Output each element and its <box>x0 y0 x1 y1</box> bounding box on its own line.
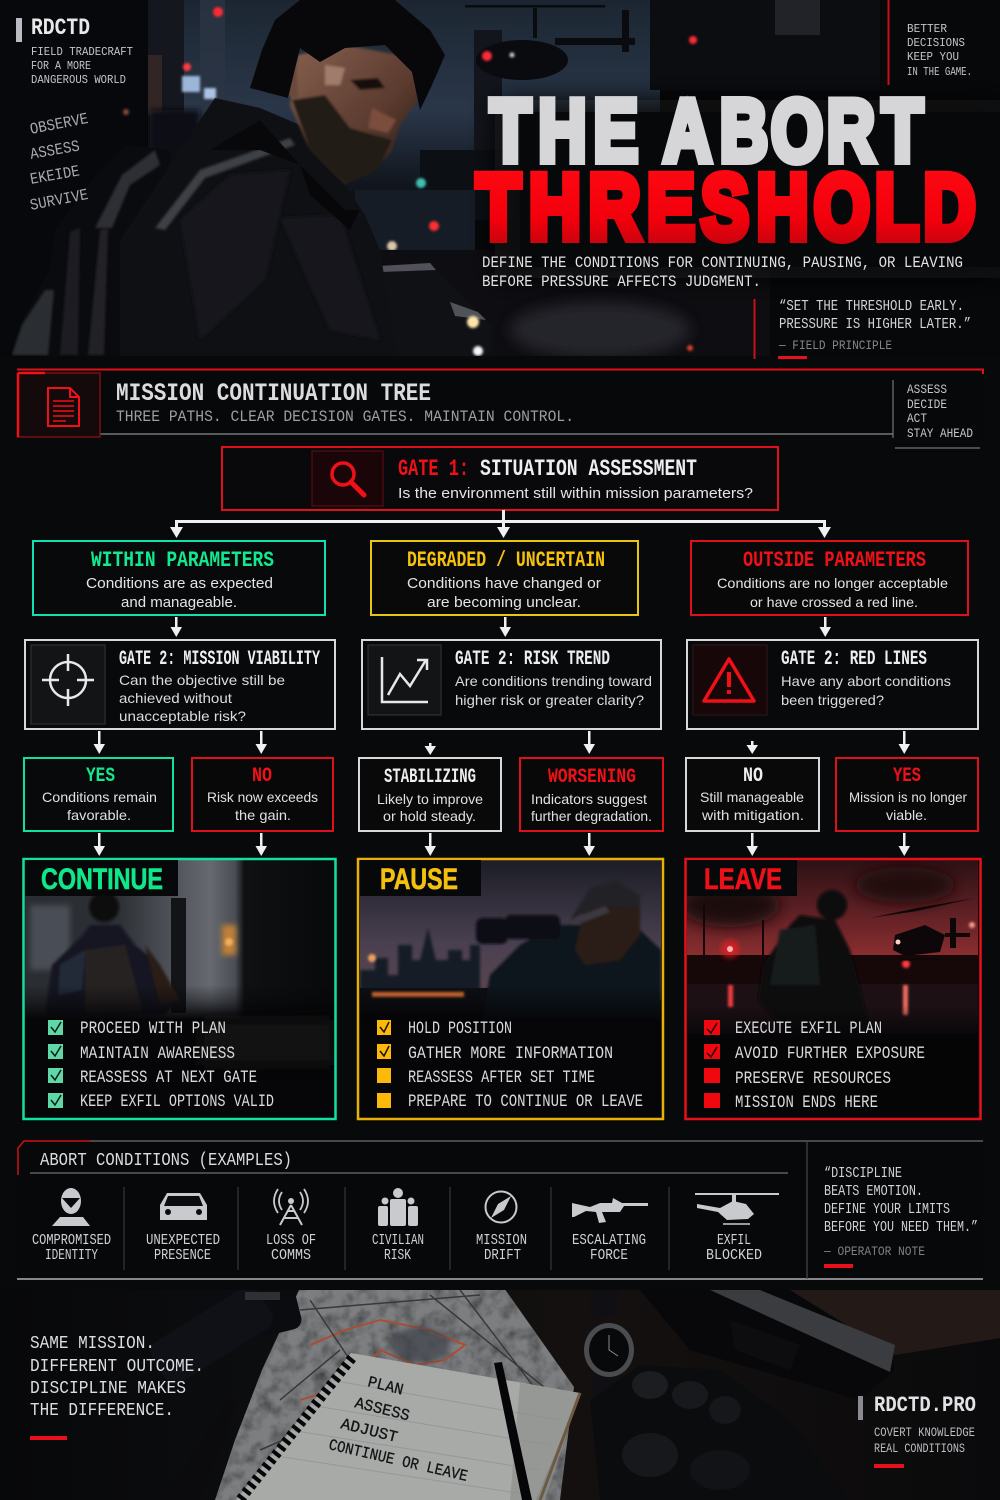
pen <box>494 1362 532 1500</box>
tilted mantra list: SURVIVE <box>29 186 90 215</box>
checklist <box>704 1019 925 1113</box>
answer: yes, no longer viable: viable. <box>886 807 927 823</box>
footer brand: COVERT KNOWLEDGE <box>874 1425 975 1440</box>
helicopter <box>870 898 974 960</box>
street <box>387 250 397 252</box>
icon: compromised identity <box>32 1188 111 1264</box>
path: outside parameters: or have crossed a red line. <box>750 594 918 610</box>
brand block: DANGEROUS WORLD <box>31 73 126 87</box>
icon: warning triangle <box>693 645 767 715</box>
handwritten notes: CONTINUE OR LEAVE <box>327 1436 469 1486</box>
top right note: BETTER <box>907 22 947 36</box>
answer: no, manageable: Still manageable <box>700 789 804 805</box>
title: THE ABORT <box>490 81 923 180</box>
answer: no, manageable: NO <box>743 765 763 788</box>
section heading: MISSION CONTINUATION TREE <box>116 379 431 408</box>
checklist: REASSESS AT NEXT GATE <box>80 1068 257 1088</box>
icon: escalating force <box>572 1198 648 1264</box>
right note: STAY AHEAD <box>907 427 973 441</box>
checklist: MAINTAIN AWARENESS <box>80 1044 235 1064</box>
title <box>477 81 975 259</box>
handwritten notes: ASSESS <box>353 1394 411 1425</box>
gate 2: mission viability: GATE 2: MISSION VIABILITY <box>119 648 320 671</box>
answer: no, manageable <box>686 758 819 831</box>
icon: exfil blocked: BLOCKED <box>706 1248 762 1264</box>
tab heading: CONTINUE <box>41 863 163 896</box>
jacket <box>165 98 384 356</box>
path: outside parameters: Conditions are no longer acceptable <box>717 575 948 591</box>
gate 2: mission viability: unacceptable risk? <box>119 708 246 724</box>
tilted mantra list: ASSESS <box>29 138 81 164</box>
brand block: RDCTD <box>31 15 90 41</box>
right note: ACT <box>907 412 927 426</box>
right note: ASSESS <box>907 383 947 397</box>
path: within parameters <box>33 541 325 615</box>
answer: worsening: WORSENING <box>548 766 636 789</box>
answer: no, manageable: with mitigation. <box>701 807 804 823</box>
gate 2: risk trend <box>362 640 661 729</box>
case <box>640 1290 794 1380</box>
path: outside parameters <box>691 541 968 615</box>
section header: mission continuation tree <box>17 370 983 448</box>
icon: unexpected presence <box>146 1193 220 1264</box>
gate 2: risk trend: GATE 2: RISK TREND <box>455 648 610 671</box>
icon: magnifier <box>312 451 383 506</box>
gate 1 box <box>222 447 778 510</box>
watch <box>590 1290 650 1420</box>
tilted mantra list: EKEIDE <box>29 163 81 189</box>
handwritten notes <box>327 1373 469 1486</box>
operator note quote: DEFINE YOUR LIMITS <box>824 1202 950 1218</box>
icon: loss of comms: COMMS <box>271 1248 311 1264</box>
footer brand: REAL CONDITIONS <box>874 1441 965 1456</box>
checklist <box>48 1019 274 1112</box>
checklist: PROCEED WITH PLAN <box>80 1019 226 1039</box>
top right note: IN THE GAME. <box>907 65 972 79</box>
icon: civilian risk <box>372 1188 424 1264</box>
title backdrop <box>488 84 770 279</box>
panel heading: ABORT CONDITIONS (EXAMPLES) <box>40 1151 292 1171</box>
answer: yes, favorable: Conditions remain <box>42 789 157 805</box>
answer: no, risk exceeds: NO <box>252 765 272 788</box>
footer brand: RDCTD.PRO <box>874 1393 976 1418</box>
top right note: DECISIONS <box>907 36 965 50</box>
hero photo: operator in night city <box>12 0 820 356</box>
gate 1 box: Is the environment still within mission parameters? <box>398 485 753 502</box>
answer: worsening: Indicators suggest <box>531 791 647 807</box>
footer brand <box>858 1393 976 1468</box>
icon: escalating force: FORCE <box>590 1248 628 1264</box>
answer: no, risk exceeds: the gain. <box>235 807 291 823</box>
map <box>215 1288 574 1500</box>
checklist: GATHER MORE INFORMATION <box>408 1044 613 1064</box>
helicopter silhouette <box>465 5 635 80</box>
subtitle <box>482 254 963 291</box>
icon: escalating force: ESCALATING <box>572 1233 646 1249</box>
operator note quote: “DISCIPLINE <box>824 1166 902 1182</box>
backpack <box>148 148 170 180</box>
subtitle: BEFORE PRESSURE AFFECTS JUDGMENT. <box>482 273 761 291</box>
answer: yes, no longer viable <box>836 758 978 831</box>
outcome panel: continue <box>24 859 336 1119</box>
icon: unexpected presence: PRESENCE <box>154 1248 211 1264</box>
arrows: paths to gate 2 <box>170 617 831 637</box>
icon: loss of comms: LOSS OF <box>266 1233 316 1249</box>
icon: exfil blocked <box>695 1193 779 1264</box>
section subheading: THREE PATHS. CLEAR DECISION GATES. MAINTAIN CONTROL. <box>116 408 574 426</box>
gate 2: mission viability: Can the objective still be <box>119 672 285 688</box>
gate 2: red lines: GATE 2: RED LINES <box>781 648 927 671</box>
operator note quote: — OPERATOR NOTE <box>823 1244 925 1259</box>
outcome panel: leave <box>680 859 980 1120</box>
checklist <box>377 1019 643 1112</box>
top right note: KEEP YOU <box>907 50 959 64</box>
photo: operator walking down alley <box>25 860 330 1060</box>
gate 2: red lines <box>687 640 978 729</box>
gate 2: mission viability <box>25 640 335 729</box>
photo: operator with binoculars over skyline <box>360 860 661 1004</box>
icon: crosshair <box>31 645 105 724</box>
answer: stabilizing: Likely to improve <box>377 791 483 807</box>
answer: worsening: further degradation. <box>531 808 652 824</box>
operator note quote <box>823 1166 978 1268</box>
operator note quote: BEATS EMOTION. <box>824 1184 923 1200</box>
checklist: MISSION ENDS HERE <box>735 1093 878 1113</box>
path: within parameters: Conditions are as expected <box>86 576 273 592</box>
answer: no, risk exceeds <box>192 758 333 831</box>
path: within parameters: and manageable. <box>121 595 237 611</box>
answer: yes, favorable: favorable. <box>67 807 131 823</box>
path: within parameters: WITHIN PARAMETERS <box>91 548 274 573</box>
icon: trend chart <box>368 645 441 715</box>
answer: yes, no longer viable: Mission is no longer <box>849 789 967 805</box>
icon: mission drift: DRIFT <box>484 1248 521 1264</box>
face <box>275 45 418 184</box>
gate 2: risk trend: Are conditions trending toward <box>455 673 652 689</box>
footer statement: DIFFERENT OUTCOME. <box>30 1357 204 1377</box>
checklist: EXECUTE EXFIL PLAN <box>735 1019 882 1039</box>
footer statement: THE DIFFERENCE. <box>30 1401 174 1421</box>
footer statement: SAME MISSION. <box>30 1334 155 1354</box>
handwritten notes: PLAN <box>366 1373 405 1400</box>
checklist: REASSESS AFTER SET TIME <box>408 1068 595 1088</box>
icon: unexpected presence: UNEXPECTED <box>146 1233 220 1249</box>
distant towers <box>474 30 502 160</box>
footer statement <box>30 1334 204 1440</box>
icon: civilian risk: CIVILIAN <box>372 1233 424 1249</box>
gloves <box>590 1365 673 1500</box>
icon: loss of comms <box>266 1189 316 1264</box>
checklist: PRESERVE RESOURCES <box>735 1069 891 1089</box>
gate 1 box: SITUATION ASSESSMENT <box>480 456 697 482</box>
checklist: AVOID FURTHER EXPOSURE <box>735 1044 925 1064</box>
gate 2: red lines: been triggered? <box>781 692 884 708</box>
path: degraded or uncertain <box>371 541 638 615</box>
photo: exfil helicopter at red dusk <box>687 860 978 1024</box>
answer: yes, no longer viable: YES <box>893 765 921 788</box>
answer: no, risk exceeds: Risk now exceeds <box>207 789 318 805</box>
answer: stabilizing: or hold steady. <box>383 808 476 824</box>
answer: yes, favorable: YES <box>86 765 115 788</box>
checklist: HOLD POSITION <box>408 1019 512 1039</box>
answer: stabilizing: STABILIZING <box>384 766 476 789</box>
gate 1 box: GATE 1: <box>398 456 469 482</box>
tab heading: LEAVE <box>704 863 782 896</box>
tilted mantra list: OBSERVE <box>29 110 90 139</box>
icon: mission drift: MISSION <box>476 1233 527 1249</box>
brand block: FOR A MORE <box>31 59 91 73</box>
brand block <box>16 15 133 87</box>
icon: compromised identity: IDENTITY <box>45 1248 98 1264</box>
abort conditions panel <box>17 1141 983 1281</box>
title: THRESHOLD <box>477 156 975 259</box>
answer: worsening <box>520 758 663 831</box>
car <box>375 262 492 362</box>
bottom rule <box>120 356 675 362</box>
outcome panel: pause <box>358 859 663 1122</box>
icon: document <box>18 373 100 437</box>
field principle quote: — FIELD PRINCIPLE <box>778 339 892 353</box>
handwritten notes: ADJUST <box>339 1415 399 1447</box>
answer: yes, favorable <box>24 758 173 831</box>
hair <box>250 0 445 110</box>
answer: stabilizing <box>359 758 501 831</box>
icon: civilian risk: RISK <box>384 1248 411 1264</box>
field principle quote: “SET THE THRESHOLD EARLY. <box>779 299 964 315</box>
arrows: answers to outcomes <box>94 833 910 856</box>
checklist: KEEP EXFIL OPTIONS VALID <box>80 1092 274 1112</box>
top right note <box>888 0 972 85</box>
field principle quote <box>754 299 971 359</box>
footer photo: map, notebook and gear <box>150 1290 1000 1500</box>
gate 2: mission viability: achieved without <box>119 690 232 706</box>
camera <box>150 1292 302 1384</box>
path: degraded or uncertain: Conditions have changed or <box>407 576 601 592</box>
gate 2: risk trend: higher risk or greater clarity? <box>455 692 644 708</box>
icon: exfil blocked: EXFIL <box>717 1233 751 1249</box>
right note <box>907 383 973 441</box>
notebook <box>236 1353 580 1500</box>
rifle <box>160 1400 236 1500</box>
field principle quote: PRESSURE IS HIGHER LATER.” <box>779 317 971 333</box>
footer statement: DISCIPLINE MAKES <box>30 1379 186 1399</box>
checklist: PREPARE TO CONTINUE OR LEAVE <box>408 1092 643 1112</box>
brand block: FIELD TRADECRAFT <box>31 45 133 59</box>
icon: mission drift <box>476 1192 527 1264</box>
arrows: gate 2 to answers <box>94 731 910 755</box>
path: degraded or uncertain: are becoming unclear. <box>427 595 581 611</box>
path: degraded or uncertain: DEGRADED / UNCERTAIN <box>407 548 605 573</box>
path: outside parameters: OUTSIDE PARAMETERS <box>743 548 926 573</box>
right note: DECIDE <box>907 398 947 412</box>
tab heading: PAUSE <box>380 863 458 896</box>
arrows: gate 1 to three paths <box>170 510 831 538</box>
tilted mantra list <box>29 110 90 215</box>
gate 2: red lines: Have any abort conditions <box>781 673 951 689</box>
icon: compromised identity: COMPROMISED <box>32 1233 111 1249</box>
